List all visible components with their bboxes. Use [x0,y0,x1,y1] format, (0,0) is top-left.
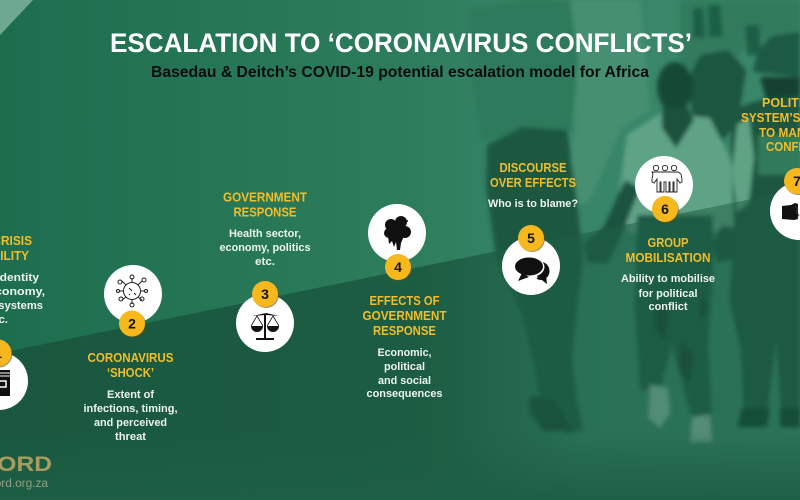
corner triangle [0,0,33,35]
step 4: effects of government response: Economic, [378,347,432,359]
step 4: effects of government response: GOVERNMENT [362,309,447,323]
step 3: government response: RESPONSE [234,206,296,220]
bottom fade [0,430,800,500]
icon: three linked people [652,165,682,192]
step 2: coronavirus shock: infections, timing, [84,403,178,415]
badge 4: 4 [394,259,402,275]
subtitle: Basedau & Deitch’s COVID-19 potential escalation model for Africa [151,64,649,81]
step 4: effects of government response [362,204,447,400]
title: ESCALATION TO ‘CORONAVIRUS CONFLICTS’ [110,28,692,58]
step 3: government response: etc. [255,256,275,268]
step 2: coronavirus shock: threat [115,431,146,443]
logo: ACCORD [0,453,52,490]
step 2: coronavirus shock: and perceived [94,417,167,429]
badge 3: 3 [261,286,269,302]
step 2: coronavirus shock: ‘SHOCK’ [107,366,154,380]
badge 3 [252,281,279,308]
camouflage trousers [635,215,713,420]
step 5: discourse over effects: DISCOURSE [500,161,566,175]
step 3: government response: Health sector, [229,228,301,240]
step 2: coronavirus shock [84,265,178,443]
icon: virus [116,275,148,307]
badge 6: 6 [661,201,669,217]
step 5: discourse over effects: OVER EFFECTS [490,176,576,190]
badge 6 [652,196,679,223]
step 6: group mobilisation: Ability to mobilise [621,273,715,285]
step 1: pre-crisis fragility [0,234,45,410]
step 6: group mobilisation: MOBILISATION [626,251,710,265]
badge 4 [385,254,412,281]
icon: fist bump [782,203,798,220]
step 4: effects of government response: RESPONSE [373,324,436,338]
badge 7 [784,168,800,195]
step 2: coronavirus shock: Extent of [107,389,154,401]
photo of running crowd and police [470,0,800,442]
step 3: government response [220,190,310,352]
step 3: government response: economy, politics [220,242,310,254]
step 5: discourse over effects: Who is to blame? [488,198,578,210]
badge 2: 2 [128,316,136,332]
icon: speech bubbles [514,256,550,284]
figure left: UN officer [470,0,578,140]
step 4: effects of government response: consequences [366,388,442,400]
lower dark diagonal band [0,189,800,500]
badge 5: 5 [527,230,535,246]
step 7: political system's ability [741,96,800,240]
badge 2 [119,310,146,338]
icon: scales [251,313,279,340]
man in light shirt [619,112,744,233]
police officer [753,32,800,77]
step 4: effects of government response: EFFECTS OF [370,294,440,308]
step 4: effects of government response: political [384,361,425,373]
step 3: government response: GOVERNMENT [223,190,307,204]
step 2: coronavirus shock: CORONAVIRUS [88,351,174,365]
step 6: group mobilisation: for political [638,288,698,300]
icon: blot tree [384,216,411,250]
step 6: group mobilisation [621,156,715,313]
step 5: discourse over effects [488,161,578,295]
step 6: group mobilisation: conflict [648,301,688,313]
step 4: effects of government response: and social [378,375,431,387]
step 6: group mobilisation: GROUP [648,236,688,250]
